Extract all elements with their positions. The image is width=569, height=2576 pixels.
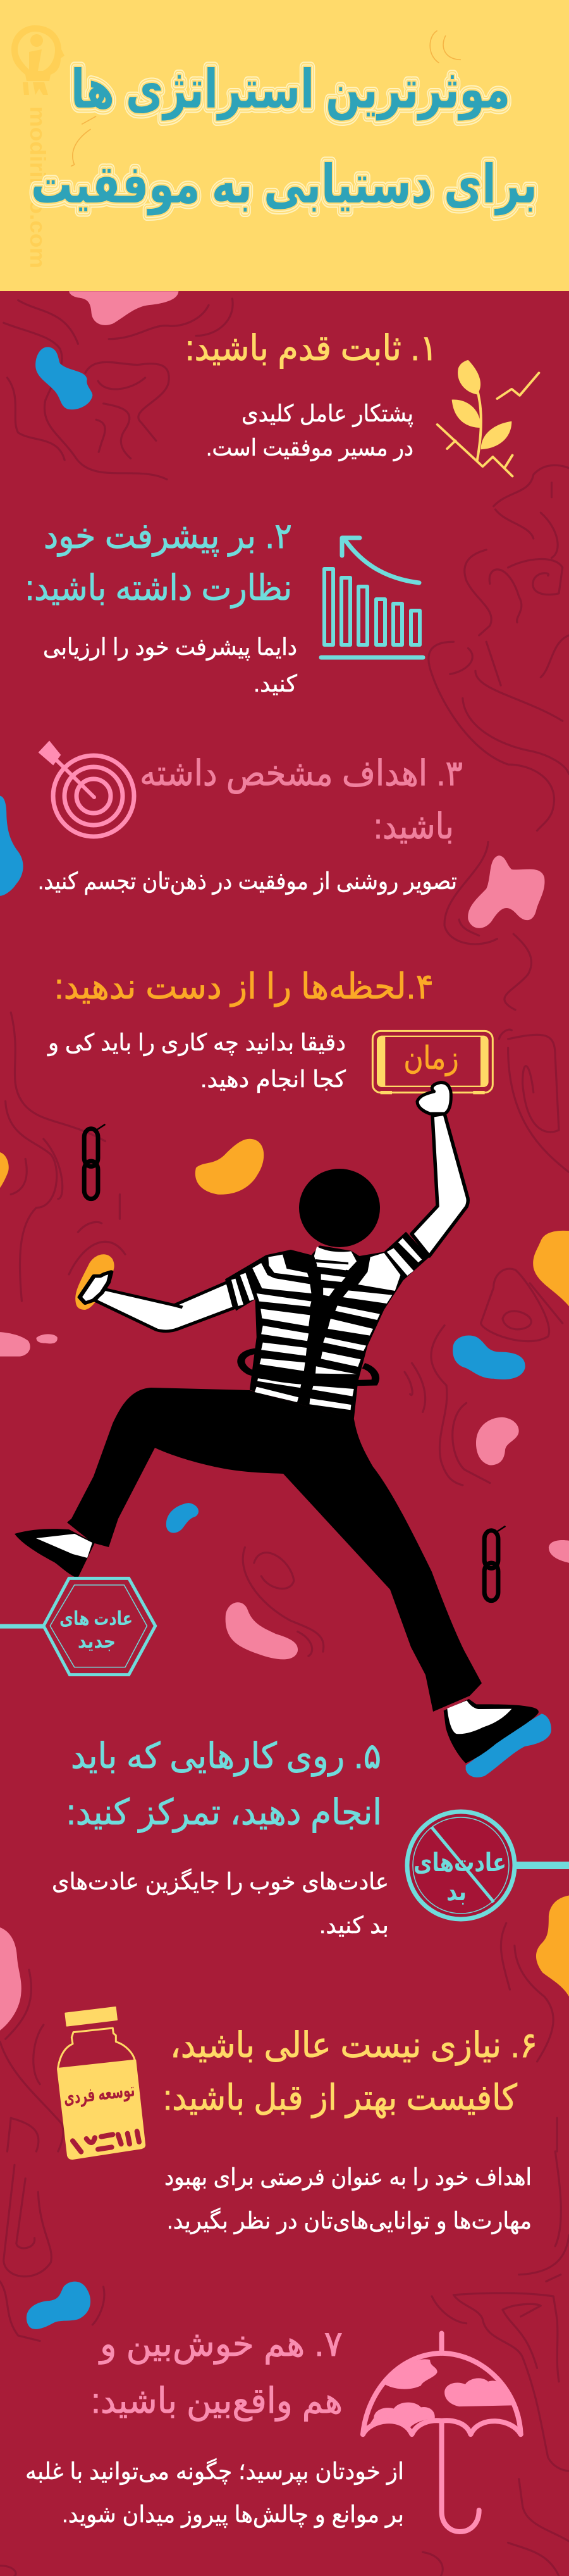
watermark logo bbox=[11, 25, 64, 95]
section 5 body bbox=[52, 1868, 389, 1938]
section 1 body: پشتکار عامل کلیدی bbox=[242, 401, 413, 427]
badge: no bad habits sign bbox=[407, 1812, 569, 1919]
section 6 heading bbox=[163, 2025, 537, 2119]
blobs: middle section bbox=[0, 1139, 569, 1659]
raised arm bbox=[412, 1114, 468, 1256]
icon: target with arrow bbox=[39, 742, 134, 837]
badge: new habits hexagon bbox=[0, 1578, 156, 1675]
section 7 heading: ۷. هم خوش‌بین و bbox=[98, 2324, 343, 2365]
section 2 heading: ۲. بر پیشرفت خود bbox=[44, 516, 292, 557]
badge: new habits hexagon: جدید bbox=[78, 1631, 116, 1652]
section 6 heading: ۶. نیازی نیست عالی باشید، bbox=[170, 2025, 537, 2066]
section 2 heading: نظارت داشته باشید: bbox=[25, 568, 292, 609]
section 4 body: دقیقا بدانید چه کاری را باید کی و bbox=[47, 1030, 346, 1056]
icon: chain upper left bbox=[84, 1124, 105, 1199]
title bbox=[31, 59, 537, 216]
section 1 body bbox=[206, 401, 413, 461]
section 5 body: بد کنید. bbox=[319, 1912, 389, 1938]
section 6 body: اهداف خود را به عنوان فرصتی برای بهبود bbox=[164, 2164, 532, 2191]
blob: blue left edge bbox=[0, 796, 23, 896]
watermark text: modirinfo.com bbox=[25, 106, 49, 268]
badge: new habits hexagon: عادت های bbox=[59, 1608, 133, 1629]
blob: pink top bbox=[69, 291, 178, 325]
section 5 heading bbox=[66, 1736, 382, 1833]
icon: personal development bottle: توسعه فردی bbox=[63, 2079, 136, 2109]
right shoe bbox=[444, 1699, 551, 1777]
section 5 heading: انجام دهید، تمرکز کنید: bbox=[66, 1792, 382, 1833]
section 7 heading: هم واقع‌بین باشید: bbox=[91, 2380, 343, 2422]
head bbox=[299, 1169, 380, 1247]
section 7 body bbox=[25, 2458, 404, 2528]
blob: blue upper left bbox=[35, 347, 92, 409]
section 4 body bbox=[47, 1030, 346, 1093]
orange hand hold bbox=[75, 1254, 114, 1310]
sign: time plate bbox=[372, 1031, 493, 1094]
section 3 heading: ۳. اهداف مشخص داشته bbox=[140, 753, 463, 794]
icon: personal development bottle bbox=[58, 2007, 145, 2159]
section 1 heading: ۱. ثابت قدم باشید: bbox=[185, 328, 437, 368]
blob: pink right bbox=[468, 856, 544, 928]
section 2 body: کنید. bbox=[254, 671, 297, 697]
section 7 body: از خودتان بپرسید؛ چگونه می‌توانید با غلبه bbox=[25, 2458, 404, 2485]
section 5 heading: ۵. روی کارهایی که باید bbox=[71, 1736, 381, 1777]
icon: chain lower right bbox=[484, 1526, 505, 1601]
badge: no bad habits sign: بد bbox=[446, 1878, 467, 1906]
section 7 body: بر موانع و چالش‌ها پیروز میدان شوید. bbox=[62, 2501, 404, 2528]
torso with stripes bbox=[225, 1232, 429, 1419]
lower arm and hand bbox=[80, 1272, 235, 1331]
icon: plant with growth line bbox=[437, 360, 539, 476]
section 2 heading bbox=[25, 516, 292, 609]
legs and trousers bbox=[67, 1388, 482, 1712]
illustration: climbing mime bbox=[15, 1083, 551, 1777]
section 3 body: تصویر روشنی از موفقیت در ذهن‌تان تجسم کنید. bbox=[38, 868, 457, 895]
section 4 heading: ۴.لحظه‌ها را از دست ندهید: bbox=[54, 966, 434, 1007]
badge: no bad habits sign: عادت‌های bbox=[413, 1849, 506, 1877]
section 5 body: عادت‌های خوب را جایگزین عادت‌های bbox=[52, 1868, 389, 1895]
blobs: lower section bbox=[0, 1896, 569, 2031]
section 6 heading: کافیست بهتر از قبل باشید: bbox=[163, 2077, 517, 2119]
section 6 body: مهارت‌ها و توانایی‌های‌تان در نظر بگیرید. bbox=[167, 2207, 532, 2234]
section 2 body bbox=[43, 634, 297, 697]
section 7 heading bbox=[91, 2324, 343, 2422]
icon: bar chart with arrow bbox=[321, 538, 423, 657]
section 3 heading: باشید: bbox=[374, 806, 454, 846]
panel: yellow header bbox=[0, 0, 569, 291]
section 1 body: در مسیر موفقیت است. bbox=[206, 435, 413, 461]
section 4 body: کجا انجام دهید. bbox=[200, 1066, 346, 1093]
raised fist bbox=[417, 1083, 451, 1114]
section 3 heading bbox=[140, 753, 463, 846]
section 6 body bbox=[164, 2164, 532, 2234]
blob: blue bottom bbox=[27, 2282, 90, 2329]
section 2 body: دایما پیشرفت خود را ارزیابی bbox=[43, 634, 297, 661]
left shoe bbox=[15, 1529, 95, 1578]
sign: time plate: زمان bbox=[403, 1040, 459, 1076]
icon: umbrella with clouds bbox=[363, 2334, 521, 2532]
